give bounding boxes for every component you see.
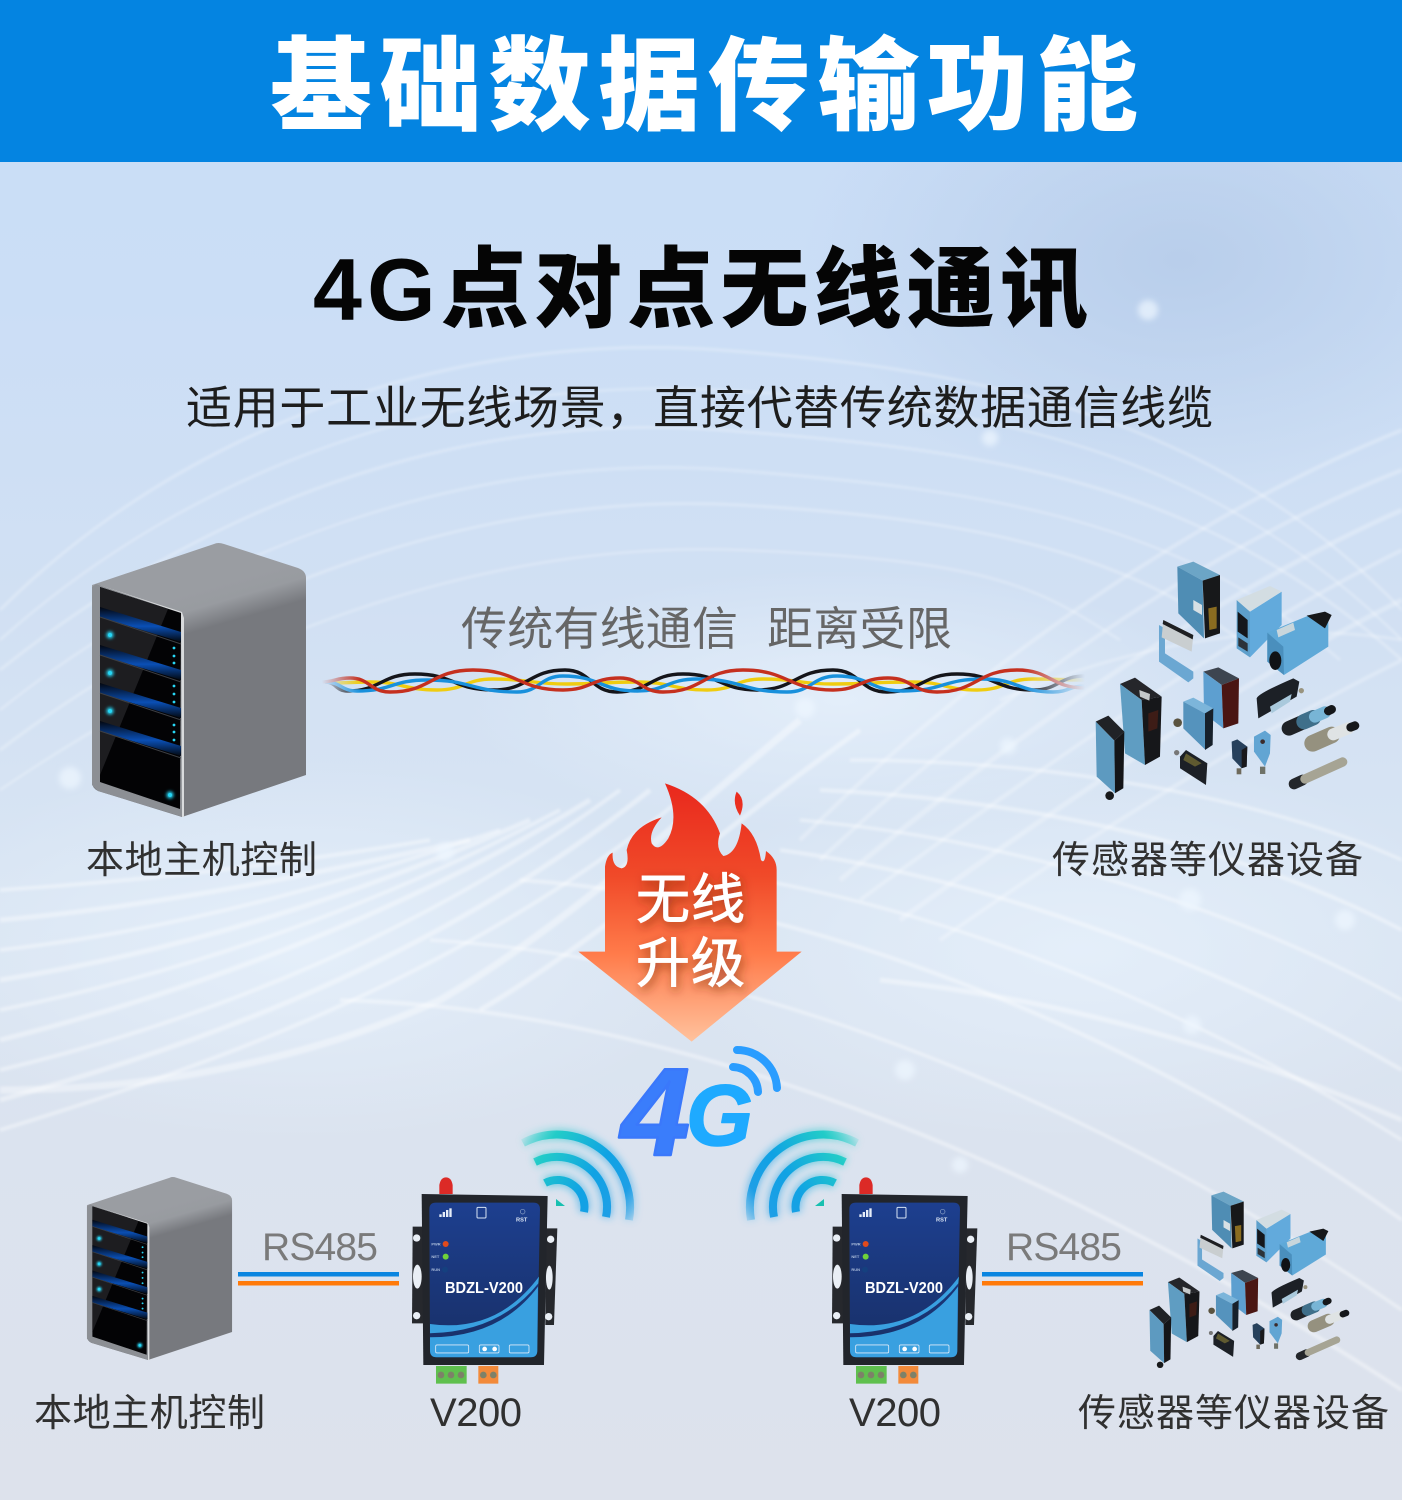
panel: 4G wireless solution: [34, 1135, 1389, 1435]
label: RS485 left: RS485: [262, 1226, 378, 1269]
icon: sensors and instruments: [1096, 562, 1355, 800]
arrow: wireless upgrade flame arrow: [578, 783, 802, 1042]
title: 基础数据传输功能: [270, 30, 1138, 144]
icon: left wifi signal: [523, 1135, 630, 1220]
icon: right V200 device: BDZL-V200: [865, 1280, 943, 1297]
right rising fan: [800, 430, 1402, 840]
icon: large server: [92, 543, 306, 817]
upper dome fan: [0, 347, 1402, 610]
icon: right V200 device: [832, 1177, 977, 1384]
icon: right wifi signal: [750, 1135, 857, 1220]
RS485 cable right: [982, 1272, 1143, 1286]
label: wired distance limited: 传统有线通信: [461, 603, 738, 655]
label: sensors and instruments: 传感器等仪器设备: [1052, 840, 1363, 882]
icon: 4G logo: 4: [618, 1044, 690, 1182]
icon: left V200 device: BDZL-V200: [445, 1280, 523, 1297]
label: sensors and instruments: 传感器等仪器设备: [1078, 1393, 1389, 1435]
label: local host control: 本地主机控制: [34, 1393, 265, 1435]
title banner: [0, 0, 1402, 162]
label: left V200: V200: [430, 1391, 522, 1435]
icon: small server: [87, 1177, 232, 1360]
label: wired distance limited: [461, 603, 952, 655]
subheading description: 适用于工业无线场景，直接代替传统数据通信线缆: [186, 382, 1213, 434]
icon: left V200 device: [412, 1177, 557, 1384]
icon: 4G logo: [618, 1044, 777, 1182]
arrow text: 无线: [636, 870, 745, 930]
RS485 cable left: [238, 1272, 399, 1286]
heading: 4G point-to-point wireless communication: 4G点对点无线通讯: [313, 240, 1088, 339]
arrow text: [636, 870, 745, 994]
lower-right descending fan: [340, 760, 1402, 1390]
label: wired distance limited: 距离受限: [767, 603, 952, 655]
lower-left rising fan: [0, 720, 860, 1130]
arrow text: 升级: [636, 934, 745, 994]
icon: 4G logo: G: [686, 1068, 753, 1164]
label: right V200: V200: [849, 1391, 941, 1435]
twisted wire cable: [320, 670, 1085, 692]
label: RS485 right: RS485: [1006, 1226, 1122, 1269]
panel: traditional wired communication: [86, 543, 1363, 882]
icon: small sensors: [1149, 1192, 1346, 1368]
label: local host control: 本地主机控制: [86, 840, 317, 882]
